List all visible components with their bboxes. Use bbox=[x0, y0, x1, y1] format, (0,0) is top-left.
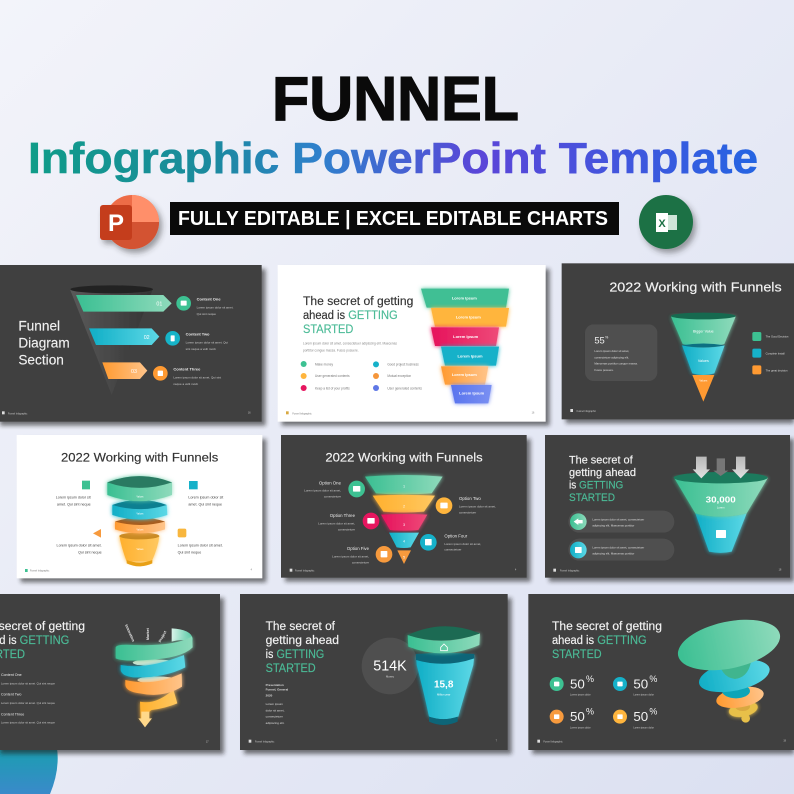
funnel layers: 1 bbox=[403, 484, 405, 488]
panel: slide 6 funnel with arrows bbox=[545, 435, 794, 582]
footer bbox=[537, 740, 787, 744]
funnel chart: Lorem Ipsum bbox=[459, 391, 485, 396]
stat four bbox=[613, 706, 657, 729]
icon: PowerPoint bbox=[100, 195, 159, 249]
top left note: amet. Qui sint neque bbox=[57, 502, 91, 506]
card: 55 percent: Fusce posuere. bbox=[594, 368, 614, 372]
heading bbox=[569, 454, 636, 504]
footer: 16 bbox=[248, 412, 251, 414]
footer: 7 bbox=[496, 741, 498, 743]
option one bbox=[304, 480, 365, 499]
option three bbox=[318, 513, 379, 532]
stat two: 50 bbox=[633, 677, 648, 692]
option three: Lorem ipsum dolor sit amet, bbox=[318, 522, 355, 526]
footer: 19 bbox=[783, 741, 787, 743]
footer: 18 bbox=[779, 570, 782, 572]
footer: Funnel Infographic bbox=[30, 570, 50, 573]
bullet list: User generated contents bbox=[315, 374, 350, 378]
3D funnel: Values bbox=[137, 513, 144, 515]
funnel bbox=[674, 472, 768, 553]
funnel bbox=[671, 313, 736, 402]
funnel: Values bbox=[698, 359, 709, 363]
content two: sint neque a velit modi. bbox=[186, 347, 216, 351]
funnel chart: Lorem Ipsum bbox=[452, 296, 477, 301]
bottom right note bbox=[178, 529, 223, 555]
icon: Excel: X bbox=[658, 218, 666, 230]
content list: Content Two bbox=[1, 693, 21, 697]
band 01 bbox=[76, 295, 172, 312]
bottom left note: Qui sint neque bbox=[78, 551, 102, 555]
footer bbox=[570, 409, 597, 413]
content one: Qui sint neque bbox=[197, 312, 216, 316]
funnel chart: Lorem Ipsum bbox=[452, 372, 477, 377]
option two: consectetuer bbox=[459, 510, 476, 514]
bullet list: Good project business bbox=[387, 363, 419, 367]
band 02 bbox=[89, 328, 159, 345]
option one: Lorem ipsum dolor sit amet, bbox=[304, 489, 341, 493]
pill two: adipiscing elit. Maecenas porttitor bbox=[592, 552, 634, 556]
stat three: 50 bbox=[570, 709, 585, 724]
footer bbox=[290, 569, 517, 573]
icon: PowerPoint: P bbox=[108, 210, 124, 237]
panel: slide 1 funnel diagram section bbox=[0, 265, 266, 426]
presentation text: Lorem ipsum bbox=[266, 702, 283, 706]
panel: slide 9 percent grid with elliptical funnel bbox=[528, 594, 794, 754]
heading bbox=[552, 619, 662, 661]
panel: slide 2 secret of getting ahead bbox=[278, 265, 550, 426]
option three: Option Three bbox=[330, 513, 356, 518]
3D funnel: Values bbox=[137, 496, 144, 498]
paragraph bbox=[303, 342, 397, 352]
footer: Funnel Infographic bbox=[543, 741, 563, 744]
bullet list: Keep a list of your profits bbox=[315, 386, 350, 390]
bottom left note: Lorem ipsum dolor sit amet. bbox=[57, 544, 102, 548]
funnel bbox=[408, 626, 480, 725]
option four: consectetuer bbox=[444, 548, 461, 552]
stat circle: 514K bbox=[373, 658, 407, 674]
content two bbox=[165, 331, 228, 351]
stat four: Lorem ipsum dolor bbox=[633, 726, 654, 729]
option five bbox=[332, 546, 392, 564]
heading: getting ahead bbox=[569, 467, 636, 479]
banner: fully editable bbox=[170, 202, 619, 235]
heading: The secret of getting bbox=[303, 294, 413, 308]
stat one bbox=[550, 674, 594, 696]
heading bbox=[18, 319, 70, 368]
legend bbox=[752, 332, 789, 374]
option five: Option Five bbox=[347, 546, 370, 551]
panel: slide 3 working with funnels bbox=[562, 263, 794, 423]
option five: consectetuer bbox=[352, 560, 369, 564]
footer: Funnel Infographic bbox=[255, 741, 275, 744]
heading bbox=[0, 619, 85, 661]
heading: STARTED bbox=[552, 647, 602, 661]
bottom left note bbox=[57, 529, 102, 555]
stat three: Lorem ipsum dolor bbox=[570, 726, 591, 729]
pill one: adipiscing elit. Maecenas porttitor bbox=[592, 524, 634, 528]
bottom right note: Lorem ipsum dolor sit amet. bbox=[178, 544, 223, 548]
presentation text: dolor sit amet, bbox=[266, 708, 285, 712]
content two: Content Two bbox=[186, 331, 210, 336]
decorative blue shape bottom left bbox=[0, 748, 58, 794]
top right note: Lorem ipsum dolor sit bbox=[188, 496, 223, 500]
footer: Funnel Infographic bbox=[292, 412, 312, 415]
elliptical funnel bbox=[673, 611, 785, 723]
funnel: 15,8 bbox=[434, 679, 454, 690]
icon: Excel bbox=[639, 195, 693, 249]
heading: Funnel bbox=[18, 319, 60, 334]
funnel: Million year bbox=[437, 693, 450, 697]
presentation text: consectetuer bbox=[266, 715, 283, 719]
bullet list bbox=[301, 361, 422, 391]
option three: consectetuer bbox=[338, 528, 355, 532]
footer: 4 bbox=[251, 570, 253, 572]
footer bbox=[25, 569, 253, 573]
panel: slide 4 layered funnel bbox=[17, 435, 266, 582]
footer: Funnel Infographic bbox=[295, 570, 315, 573]
presentation text: Funnel, General bbox=[266, 688, 288, 692]
panel: slide 5 options funnel bbox=[281, 435, 531, 582]
heading: Diagram bbox=[18, 336, 70, 351]
heading: 2022 Working with Funnels bbox=[609, 280, 782, 295]
pill one: Lorem ipsum dolor sit amet, consectetuer bbox=[592, 517, 644, 521]
option one: consectetuer bbox=[324, 495, 341, 499]
funnel chart: Lorem Ipsum bbox=[456, 314, 481, 319]
content list: Content One bbox=[1, 673, 22, 677]
legend: The Good Decision bbox=[766, 334, 789, 338]
bullet list: Make money bbox=[315, 362, 333, 366]
content two: Lorem ipsum dolor sit amet. Qui bbox=[186, 340, 228, 344]
footer bbox=[286, 411, 535, 415]
band 03 bbox=[102, 362, 147, 379]
slides group bbox=[0, 263, 794, 754]
funnel chart: Lorem Ipsum bbox=[453, 334, 479, 339]
heading: 2022 Working with Funnels bbox=[325, 451, 483, 465]
funnel: Values bbox=[699, 379, 708, 383]
funnel: 30,000 bbox=[706, 495, 736, 505]
spiral labels: Project bbox=[158, 630, 168, 643]
bullet list: User generated contents bbox=[387, 386, 422, 390]
heading: is GETTING bbox=[266, 647, 324, 661]
heading: The secret of bbox=[569, 454, 634, 466]
spiral labels: Innovation bbox=[124, 624, 135, 642]
stat two: % bbox=[649, 674, 657, 684]
footer: 4 bbox=[515, 570, 517, 572]
paragraph: Lorem ipsum dolor sit amet, consectetuer adipiscing elit. Maecenas bbox=[303, 342, 397, 346]
heading: STARTED bbox=[569, 492, 615, 504]
legend: The great decision bbox=[766, 369, 788, 373]
3D funnel bbox=[107, 476, 172, 566]
3D funnel: Values bbox=[137, 530, 144, 532]
top right note bbox=[188, 481, 223, 506]
panel: slide 7 spiral funnel bbox=[0, 594, 224, 754]
band 03: 03 bbox=[131, 369, 137, 375]
option two bbox=[436, 496, 496, 514]
pill two: Lorem ipsum dolor sit amet, consectetuer bbox=[592, 545, 644, 549]
top left note: Lorem ipsum dolor sit bbox=[56, 495, 91, 499]
option four bbox=[420, 534, 481, 552]
footer: Funnel Infographic bbox=[577, 410, 597, 413]
card: 55 percent bbox=[585, 324, 657, 381]
content list: Lorem ipsum dolor sit amet. Qui sint neque bbox=[1, 721, 55, 725]
footer bbox=[249, 740, 498, 744]
card: 55 percent: Maecenas porttitor congue massa. bbox=[594, 362, 638, 366]
option four: Lorem ipsum dolor sit amet, bbox=[444, 542, 481, 546]
content list bbox=[1, 673, 55, 725]
heading: ahead is GETTING bbox=[552, 633, 647, 647]
footer bbox=[2, 411, 251, 415]
pill one bbox=[568, 511, 674, 533]
spiral labels bbox=[124, 624, 168, 643]
main title: FUNNEL bbox=[272, 65, 519, 134]
heading: STARTED bbox=[266, 661, 316, 675]
option two: Option Two bbox=[459, 496, 481, 501]
stat three bbox=[550, 706, 594, 729]
card: 55 percent: consectetuer adipiscing elit. bbox=[594, 355, 629, 359]
3D funnel: Values bbox=[137, 549, 144, 551]
heading: STARTED bbox=[303, 322, 353, 336]
stat circle bbox=[362, 638, 418, 694]
band 02: 02 bbox=[144, 335, 150, 341]
footer: Funnel Infographic bbox=[560, 569, 580, 572]
option four: Option Four bbox=[444, 534, 468, 539]
funnel layers: 3 bbox=[403, 523, 405, 527]
bullet list: Mutual exception bbox=[387, 374, 411, 378]
band 01: 01 bbox=[156, 302, 162, 308]
footer: 16 bbox=[532, 412, 535, 414]
content one: Content One bbox=[197, 297, 221, 302]
content one: Lorem ipsum dolor sit amet. bbox=[197, 306, 234, 310]
stat four: 50 bbox=[633, 709, 648, 724]
option five: Lorem ipsum dolor sit amet, bbox=[332, 554, 369, 558]
heading: The secret of getting bbox=[552, 619, 662, 633]
content three: Lorem ipsum dolor sit amet. Qui sint bbox=[173, 376, 221, 380]
paragraph: porttitor congue massa. Fusce posuere. bbox=[303, 348, 359, 352]
content list: Lorem ipsum dolor sit amet. Qui sint neque bbox=[1, 681, 55, 685]
funnel layers: 4 bbox=[403, 539, 405, 543]
stat two bbox=[613, 674, 657, 696]
presentation text: adipiscing elit. bbox=[266, 721, 285, 725]
legend: Complete Install bbox=[766, 351, 785, 355]
content three: Content Three bbox=[173, 366, 201, 371]
bottom right note: Qui sint neque bbox=[178, 551, 201, 555]
heading: Section bbox=[18, 353, 64, 368]
funnel chart: Lorem Ipsum bbox=[457, 354, 483, 359]
pill two bbox=[568, 539, 674, 561]
top left note bbox=[56, 481, 91, 506]
option one: Option One bbox=[319, 480, 342, 485]
funnel chart bbox=[421, 289, 509, 403]
card: 55 percent: % bbox=[605, 336, 609, 340]
top right note: amet. Qui sint neque bbox=[188, 502, 222, 506]
funnel layers: 2 bbox=[403, 505, 405, 509]
heading bbox=[266, 619, 339, 675]
stat one: Lorem ipsum dolor bbox=[570, 693, 591, 696]
banner: fully editable: FULLY EDITABLE | EXCEL EDITABLE CHARTS bbox=[178, 208, 608, 230]
content one bbox=[176, 296, 234, 316]
stat three: % bbox=[586, 706, 594, 716]
funnel layers: 5 bbox=[403, 555, 405, 559]
stat one: % bbox=[586, 674, 594, 684]
stat circle: Money bbox=[386, 674, 395, 678]
card: 55 percent: Lorem ipsum dolor sit amet, bbox=[594, 349, 629, 353]
funnel: Lorem bbox=[717, 506, 725, 510]
heading: getting ahead bbox=[266, 633, 339, 647]
content three: neque a velit modi. bbox=[173, 382, 199, 386]
presentation text bbox=[266, 683, 288, 725]
option two: Lorem ipsum dolor sit amet, bbox=[459, 504, 496, 508]
content list: Lorem ipsum dolor sit amet. Qui sint neque bbox=[1, 701, 55, 705]
heading bbox=[303, 294, 413, 336]
heading: 2022 Working with Funnels bbox=[61, 451, 218, 465]
stat one: 50 bbox=[570, 677, 585, 692]
heading: The secret of bbox=[266, 619, 336, 633]
presentation text: 2020 bbox=[266, 693, 273, 697]
cone bbox=[70, 285, 153, 395]
stat two: Lorem ipsum dolor bbox=[633, 693, 654, 696]
arrows bbox=[693, 457, 749, 478]
content list: Content Three bbox=[1, 712, 24, 716]
spiral ribbon bbox=[116, 628, 193, 727]
funnel layers bbox=[365, 475, 443, 564]
page number: 17 bbox=[206, 741, 209, 743]
heading: ahead is GETTING bbox=[303, 308, 398, 322]
stat four: % bbox=[649, 706, 657, 716]
subtitle: Infographic PowerPoint Template bbox=[28, 134, 758, 183]
card: 55 percent: 55 bbox=[594, 335, 605, 345]
heading: is GETTING bbox=[569, 479, 623, 491]
presentation text: Presentation bbox=[266, 683, 284, 687]
funnel: Bigger Value bbox=[693, 329, 714, 333]
panel: slide 8 big numbers funnel bbox=[240, 594, 512, 754]
footer bbox=[553, 569, 782, 572]
content three bbox=[153, 366, 221, 386]
spiral labels: Market bbox=[146, 627, 150, 640]
footer: Funnel Infographic bbox=[8, 412, 28, 415]
